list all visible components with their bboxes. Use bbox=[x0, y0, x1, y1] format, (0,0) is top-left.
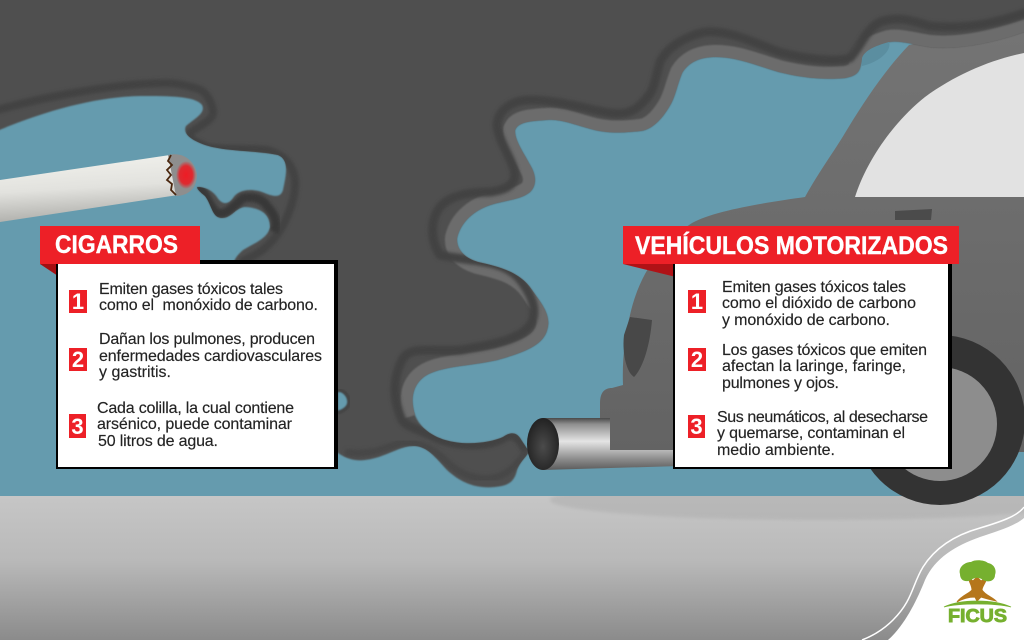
heading: vehiculos: VEHÍCULOS MOTORIZADOS bbox=[635, 231, 948, 260]
cigarette bbox=[0, 154, 197, 222]
point 1 text bbox=[722, 279, 916, 329]
car tail light bbox=[623, 317, 652, 377]
badge 2 bbox=[688, 347, 706, 372]
badge 1 bbox=[69, 289, 87, 314]
point 3 text bbox=[97, 400, 294, 450]
panel: vehiculos motorizados bbox=[673, 263, 952, 469]
ribbon fold: cigarros bbox=[40, 264, 58, 276]
point 3 text: Cada colilla, la cual contiene bbox=[97, 400, 294, 417]
point 3 text: 50 litros de agua. bbox=[98, 433, 218, 450]
badge 2: 2 bbox=[691, 347, 703, 372]
logo tree trunk bbox=[957, 577, 996, 602]
road bbox=[0, 496, 1024, 640]
point 3 text: medio ambiente. bbox=[717, 442, 835, 459]
header ribbon: vehiculos bbox=[623, 226, 959, 264]
point 1 text: como el dióxido de carbono bbox=[722, 295, 916, 312]
sky background bbox=[0, 0, 1024, 500]
road shadow under car bbox=[552, 496, 1024, 519]
point 2 text bbox=[722, 342, 927, 392]
car window bbox=[855, 53, 1024, 197]
point 2 text: pulmones y ojos. bbox=[722, 375, 839, 392]
cigarette ash bbox=[168, 154, 197, 196]
point 2 text: y gastritis. bbox=[99, 364, 171, 381]
header ribbon: cigarros bbox=[40, 226, 200, 264]
point 3 text: arsénico, puede contaminar bbox=[97, 416, 293, 433]
point 2 text: Dañan los pulmones, producen bbox=[99, 331, 315, 348]
darker sky patch near car roof bbox=[862, 42, 889, 66]
point 3 text: Sus neumáticos, al desecharse bbox=[717, 409, 928, 426]
point 2 text: enfermedades cardiovasculares bbox=[99, 348, 322, 365]
point 1 text: Emiten gases tóxicos tales bbox=[722, 279, 906, 296]
point 2 text: Los gases tóxicos que emiten bbox=[722, 342, 927, 359]
car door handle bbox=[895, 209, 932, 220]
cigarette burn edge bbox=[167, 155, 176, 195]
badge 2: 2 bbox=[72, 347, 84, 372]
point 2 text bbox=[99, 331, 322, 381]
point 2 text: afectan la laringe, faringe, bbox=[722, 358, 906, 375]
logo wordmark: FICUS bbox=[948, 606, 1007, 626]
logo: ficus bbox=[944, 560, 1011, 626]
point 3 text bbox=[717, 409, 928, 459]
logo tree canopy bbox=[960, 560, 996, 581]
logo hill arc bbox=[944, 601, 1011, 607]
exhaust pipe bbox=[527, 418, 680, 470]
smoke gap bbox=[336, 390, 349, 413]
smoke cloud bbox=[0, 0, 1024, 487]
heading: cigarros: CIGARROS bbox=[55, 231, 178, 259]
point 1 text: y monóxido de carbono. bbox=[722, 312, 890, 329]
badge 2 bbox=[69, 347, 87, 372]
point 1 text: Emiten gases tóxicos tales bbox=[99, 281, 283, 298]
exhaust opening bbox=[527, 418, 559, 470]
point 1 text: como el monóxido de carbono. bbox=[99, 297, 318, 314]
point 1 text bbox=[99, 281, 318, 314]
badge 3: 3 bbox=[71, 414, 84, 439]
corner white panel bbox=[862, 507, 1024, 640]
badge 1: 1 bbox=[691, 289, 703, 314]
badge 1 bbox=[688, 289, 706, 314]
car wheel bbox=[855, 335, 1024, 505]
point 3 text: y quemarse, contaminan el bbox=[717, 425, 905, 442]
badge 1: 1 bbox=[72, 289, 84, 314]
ribbon fold: vehiculos bbox=[623, 264, 676, 277]
panel: cigarros bbox=[56, 260, 338, 469]
cigarette ember bbox=[176, 161, 196, 189]
car body bbox=[600, 28, 1024, 452]
badge 3: 3 bbox=[690, 414, 703, 439]
